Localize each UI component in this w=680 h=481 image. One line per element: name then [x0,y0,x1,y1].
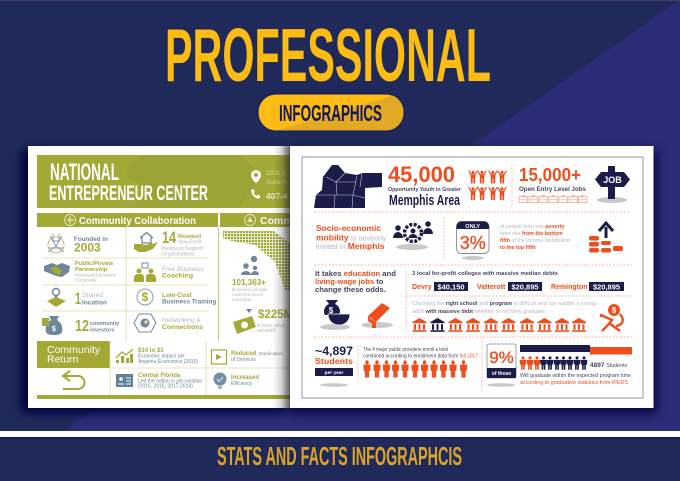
panel: memphis page [290,146,654,408]
icon: briefcases [519,195,587,203]
stat: loan value [257,309,293,334]
item: increased efficiency: Increased [231,375,259,381]
stat: devry: $40,150 [437,282,465,292]
heading bar: community [220,213,293,227]
stat: 45,000: Opportunity Youth in Greater [388,187,462,193]
text: poverty statement: fifth of the income distribution [500,238,570,244]
item: networking and connections: Connections [162,324,203,331]
text: choosing the right school: adult with massive debt whether or not they graduate [412,309,545,315]
text: socio-economic mobility: limited in Memphis [316,241,385,251]
text: choosing the right school: Choosing the right school and program is difficult and can saddle a young [412,301,596,307]
icon: cash [233,309,256,334]
stat: people coached: inception [232,297,252,303]
phone number: 407-4 [266,191,288,201]
text: poverty statement [500,224,570,251]
text: poverty statement: of people born into poverty [500,224,565,230]
text: education and jobs: change these odds. [315,285,386,294]
item: networking and connections: Networking & [162,317,201,324]
stat: remington [551,282,624,292]
icon: person carrying debt [600,304,623,331]
item: founded in 2003: 2003 [74,240,101,254]
address line two: Suite A, [266,179,289,186]
icon: book [361,303,393,328]
item: shared location: location [82,300,107,306]
item: community investors: investors [90,328,114,334]
item: reduced duplication: Reduced [231,351,257,357]
heading bar: community collaboration: Community Collaboration [79,215,196,227]
icon: phone [251,189,260,199]
stat: devry: Devry [412,284,432,291]
item: reduced duplication: Duplication [259,351,283,357]
item: increased efficiency [214,372,259,389]
heading bar: community collaboration [37,213,218,227]
item: resident non-profit [134,229,204,258]
text: education and jobs: living-wage jobs to [315,277,384,286]
text: poverty statement: to the top fifth [500,245,536,251]
icon: people [241,256,259,275]
callout: only 3%: 3% [460,233,486,253]
page shadows [21,150,657,414]
icon: money bag and bowl [320,300,350,330]
item: community investors: 12 [75,318,89,335]
header banner [37,155,292,208]
icon: location pin [251,170,261,184]
stat: people coached [232,277,268,303]
item: resident non-profit: Business Support [162,246,204,252]
callout: only 3% [456,222,489,260]
item: resident non-profit: Non-Profit [178,240,202,246]
heading: entrepreneur center: ENTREPRENEUR CENTER [49,182,208,205]
page fold shadow [273,146,291,408]
stat: loan value: assisted [257,328,276,334]
icon: job signpost [595,166,630,203]
stat: vatterott: $20,895 [511,282,539,292]
item: founded in 2003: Founded in [74,236,108,243]
stat: 15,000+: Open Entry Level Jobs [519,186,586,193]
stat: loan value: $225M [258,309,293,321]
address: 3201 E [266,170,287,177]
icon: return arrow [63,371,84,389]
heading box: community return: Community [47,344,101,356]
stat: 4,897 students [315,344,353,387]
map: memphis area [314,165,382,208]
icon: college buildings [412,318,586,332]
item: community investors: community [90,321,120,327]
panel: national entrepreneur center page [28,146,293,408]
stat: 45,000 [388,162,462,209]
item: economic impact: $14 to $1 [138,348,164,354]
stat: people coached: Business people [232,287,268,293]
item: public private partnership: Municipal/Education [75,272,117,278]
icon: money bag and bowl: $ [329,306,334,315]
item: resident non-profit: 14 [162,229,177,247]
item: resident non-profit: Resident [178,234,201,240]
text: public providers [363,347,478,360]
icon: person carrying debt: $ [612,306,617,315]
text: local colleges: 3 local for-profit colleges with massive median debts [412,271,558,277]
stat: 4,897 students: ~4,897 [315,344,353,358]
stat: 4,897 students: per year [325,370,343,376]
item: economic impact: Angelou Economics (2015) [138,359,198,365]
heading bar: community: Comm [260,215,293,227]
text: socio-economic mobility: mobility is severely [316,232,387,242]
text: education and jobs: It takes education and [315,269,396,278]
stat: 45,000: 45,000 [388,162,455,187]
item: reduced duplication [212,350,283,364]
item: low-cost business training: $ [142,290,149,304]
stat: 4,897 students: Students [315,356,353,366]
item: reduced duplication: of Services [231,357,256,363]
item: low-cost business training: Business Training [162,298,216,306]
stat: remington: $20,895 [593,282,620,292]
icon: orange people groups [468,170,507,200]
stat: 15,000+: 15,000+ [519,165,581,185]
item: public private partnership [44,261,117,282]
stat: devry [412,282,468,292]
item: public private partnership: Public/Private [75,261,114,267]
text: socio-economic mobility: Socio-economic [316,223,381,233]
item: resident non-profit: Organizations [162,252,195,258]
callout: 9% of those: of those [492,371,511,377]
stat: loan value: in loan value [257,323,285,329]
badge: infographics: INFOGRAPHICS [279,100,382,126]
item: public private partnership: /Corporate [75,278,97,282]
heading box: community return: Return [47,354,79,366]
item: economic impact: Economic Impact per [138,354,185,360]
item: shared location: Shared [82,292,103,299]
item: shared location [47,288,107,308]
text: poverty statement: here rise from the bottom [500,231,563,237]
stat: 4897 students: 4897 Students [590,362,628,369]
text: public providers: The 4 major public providers enroll a total [363,347,448,353]
item: low-cost business training: Low-Cost [162,292,192,299]
item: central florida [116,373,202,390]
item: central florida: (2015, 2016, 2017,2018) [138,384,193,390]
item: founded in 2003 [48,234,108,254]
badge: infographics [258,94,404,131]
stat: remington: Remington [551,284,588,291]
callout: 9% of those: 9% [489,348,514,367]
stat: 45,000: Memphis Area [389,192,460,209]
text: public providers: combined according to enrollment data from fall 2017 [363,354,478,360]
item: low-cost business training [137,289,216,306]
text: socio-economic mobility [316,223,387,251]
stat: people coached: 101,363+ [232,277,266,287]
text: graduation statement: according to graduation statistics from IPEDS [520,380,629,386]
item: economic impact [116,348,198,365]
heading: national: NATIONAL [50,159,119,186]
icon: coins with arrow [589,223,623,252]
callout: 9% of those [487,344,516,387]
item: community investors: $ [52,326,56,333]
text: choosing the right school [412,301,596,315]
stat: 15,000+ [519,165,586,193]
text: education and jobs [315,269,396,294]
bottom bar [37,395,292,399]
icon: orange people row [364,360,467,377]
item: free business coaching: Free Business [162,266,204,273]
item: networking and connections [134,314,203,332]
text: graduation statement: Will graduate within the expected program time [520,373,631,379]
item: shared location: 1 [75,289,81,308]
icon: graduation people row [520,356,587,370]
item: central florida: Central Florida [138,373,181,379]
item: free business coaching: Coaching [162,272,193,280]
footer caption: STATS AND FACTS INFOGRAPHCIS [217,441,462,471]
icon: gear with people [393,221,433,250]
item: public private partnership: Partnership [75,267,108,273]
text: graduation statement [520,373,631,386]
item: free business coaching [134,263,204,282]
item: central florida: Led the nation in job creation [138,378,202,384]
callout: only 3%: ONLY [465,224,480,230]
stat: vatterott: Vatterott [477,284,506,291]
dotted map [223,231,292,290]
bar: share of students [520,345,632,354]
stat: people coached: coached since [232,292,264,298]
heading box: community return [37,341,110,368]
icon: job signpost: JOB [603,175,622,185]
item: increased efficiency: Efficiency [231,381,253,387]
item: community investors [42,316,120,335]
stat: vatterott [477,282,542,292]
